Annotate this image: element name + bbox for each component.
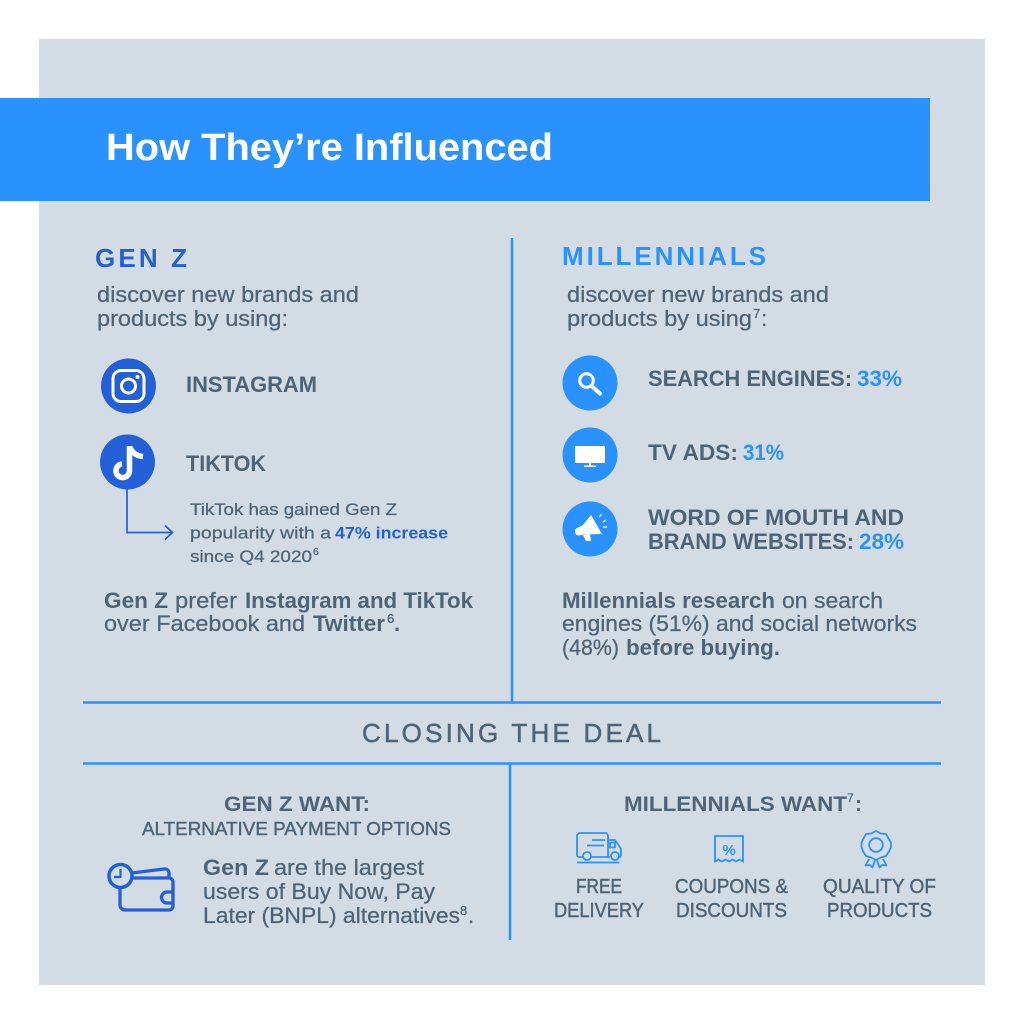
label: Instagram: INSTAGRAM [186, 372, 317, 397]
callout: TikTok growth: since Q4 2020 [190, 547, 312, 566]
text: BNPL: Gen Z [203, 855, 269, 880]
label: TV ads [648, 440, 784, 465]
text: Millennials intro: discover new brands and [567, 282, 829, 307]
text: Millennials intro: 7 [753, 306, 760, 321]
text: Gen Z intro: products by using: [97, 306, 288, 331]
label: quality: QUALITY OF [823, 876, 936, 898]
text: Gen Z preference: Twitter [313, 611, 385, 636]
text: BNPL [203, 855, 474, 928]
text: BNPL: are the largest [274, 855, 424, 880]
title banner [0, 98, 930, 201]
label: free delivery [554, 876, 644, 922]
icon: coupon [715, 836, 743, 862]
label: search engines: 33% [857, 366, 902, 391]
text: Gen Z intro [97, 282, 359, 331]
text: Millennials research: engines (51%) and social networks [562, 611, 917, 636]
icon: megaphone [562, 502, 618, 556]
panel: Gen Z want [109, 793, 474, 928]
label: coupons: DISCOUNTS [676, 900, 787, 922]
label: coupons: COUPONS & [675, 876, 789, 898]
heading: closing the deal: CLOSING THE DEAL [362, 718, 661, 748]
text: BNPL: users of Buy Now, Pay [203, 879, 435, 904]
icon: truck [577, 833, 621, 862]
title: How They’re Influenced [106, 127, 553, 169]
panel: Millennials [562, 241, 917, 660]
arrow: TikTok callout [127, 489, 172, 540]
label: search engines: SEARCH ENGINES: [648, 366, 852, 391]
text: Gen Z preference: prefer [175, 588, 237, 613]
text: Gen Z preference: Gen Z [104, 588, 168, 613]
text: Gen Z preference: . [394, 611, 400, 636]
heading: Millennials want: MILLENNIALS WANT [624, 793, 847, 816]
icon: Instagram [101, 358, 156, 414]
icon: coupon: % [722, 842, 736, 859]
subheading: alternative payment: ALTERNATIVE PAYMENT OPTIONS [142, 819, 451, 839]
icon: quality badge [862, 831, 891, 868]
text: Millennials research: on search [782, 588, 883, 613]
text: Millennials research: before buying. [626, 635, 780, 660]
heading: Millennials want: : [855, 793, 862, 816]
text: Millennials intro [567, 282, 829, 331]
text: Gen Z preference: 6 [387, 611, 394, 626]
text: BNPL: Later (BNPL) alternatives [203, 903, 460, 928]
panel: Gen Z [95, 243, 474, 636]
icon: TikTok [100, 434, 155, 490]
label: free delivery: DELIVERY [554, 900, 644, 922]
callout: TikTok growth [190, 500, 448, 566]
panel: Millennials want [554, 791, 936, 922]
label: TV ads: TV ADS: [648, 440, 738, 465]
heading: Gen Z: GEN Z [95, 243, 187, 273]
text: Gen Z preference: Instagram and TikTok [245, 588, 474, 613]
text: Gen Z preference [104, 588, 474, 636]
text: BNPL: 8 [460, 903, 467, 918]
callout: TikTok growth: TikTok has gained Gen Z [190, 500, 397, 519]
heading: Millennials: MILLENNIALS [562, 241, 766, 271]
heading: Millennials want: 7 [847, 791, 854, 805]
text: Gen Z preference: over Facebook and [104, 611, 305, 636]
label: quality [823, 876, 936, 922]
icon: wallet with clock [109, 864, 173, 910]
label: TV ads: 31% [743, 440, 784, 465]
icon: search [562, 356, 618, 410]
heading: Gen Z want: GEN Z WANT: [224, 793, 370, 816]
label: word of mouth [648, 505, 904, 554]
label: word of mouth: 28% [859, 529, 904, 554]
text: BNPL: . [468, 903, 474, 928]
callout: TikTok growth: 6 [313, 546, 319, 558]
text: Millennials intro: products by using [567, 306, 752, 331]
callout: TikTok growth: popularity with a [190, 524, 332, 542]
text: Millennials research: (48%) [562, 635, 619, 660]
text: Millennials intro: : [761, 306, 767, 331]
text: Millennials research [562, 588, 917, 660]
label: word of mouth: WORD OF MOUTH AND [648, 505, 904, 530]
label: TikTok: TIKTOK [186, 451, 266, 476]
label: quality: PRODUCTS [827, 900, 932, 922]
label: coupons [675, 876, 789, 922]
text: Gen Z intro: discover new brands and [97, 282, 359, 307]
icon: TV [562, 428, 618, 482]
label: word of mouth: BRAND WEBSITES: [648, 529, 854, 554]
text: Millennials research: Millennials research [562, 588, 775, 613]
callout: TikTok growth: 47% increase [335, 524, 448, 542]
label: free delivery: FREE [576, 876, 622, 898]
